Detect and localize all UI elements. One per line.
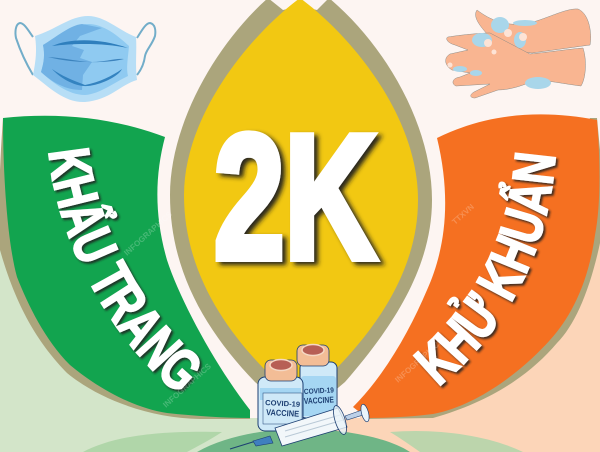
- vial front cap: [265, 360, 297, 381]
- syringe plunger disc: [359, 403, 371, 423]
- mask dark panel: [41, 24, 102, 90]
- heading: khu khuan: KHỬ KHUẨN: [412, 152, 560, 390]
- vial front body: [258, 377, 303, 431]
- watermarks: INFOGRAPHICS: [161, 361, 213, 409]
- panel: khu khuan leaf: [353, 114, 600, 419]
- leaf shadow: orange: [365, 118, 600, 419]
- leaf: green: [3, 116, 250, 418]
- vial back body: [300, 362, 337, 418]
- watermarks: TTXVN: [450, 202, 476, 226]
- syringe: [230, 403, 371, 449]
- mask ear loops: [15, 23, 33, 75]
- heading: khau trang: KHẨU TRANG: [48, 148, 204, 393]
- mask outer: [33, 16, 137, 102]
- background: lower right peach: [300, 230, 600, 452]
- mask inner: [41, 24, 129, 95]
- vial front text: COVID-19: [265, 398, 300, 409]
- syringe flange: [331, 404, 349, 436]
- decorative leaf: bottom left: [83, 432, 222, 452]
- vial back label: COVID-19: [304, 385, 334, 396]
- vial front text: [265, 398, 300, 419]
- syringe hub: [253, 436, 273, 446]
- background: lower left green: [0, 240, 300, 452]
- vial front label: [263, 393, 302, 424]
- syringe plunger: [345, 410, 363, 420]
- vial back label: VACCINE: [304, 394, 334, 406]
- vial back top: [302, 344, 324, 356]
- watermarks: [122, 202, 476, 409]
- mask pleats: [52, 40, 128, 48]
- vial back: [297, 344, 337, 418]
- centre leaf border: [170, 0, 432, 420]
- syringe needle: [230, 441, 256, 449]
- soap foam: [453, 17, 551, 89]
- vial back cap: [297, 345, 329, 366]
- icon: vaccine vials and syringe: [230, 344, 371, 449]
- icon: washing hands: [446, 9, 591, 98]
- icon: face mask: [15, 16, 155, 102]
- vial front: [258, 360, 303, 431]
- vial front top: [270, 360, 292, 370]
- panel: khau trang leaf: [0, 116, 250, 419]
- soap bubbles: [448, 29, 527, 68]
- centre leaf yellow: [184, 0, 418, 405]
- decorative leaf: bottom centre: [197, 429, 410, 452]
- watermarks: INFOGRAPHICS: [122, 209, 174, 257]
- vial front text: VACCINE: [266, 407, 300, 419]
- upper hand and arm: [476, 9, 591, 53]
- lower hand and arm: [446, 33, 585, 98]
- heading: 2K: 2K: [214, 98, 376, 296]
- watermarks: INFOGRAPHICS: [393, 336, 445, 384]
- decorative leaf: bottom right: [390, 431, 523, 452]
- syringe barrel: [275, 408, 347, 446]
- leaf shadow: green: [0, 118, 250, 419]
- leaf: orange: [353, 114, 599, 418]
- vial back label: [304, 385, 334, 406]
